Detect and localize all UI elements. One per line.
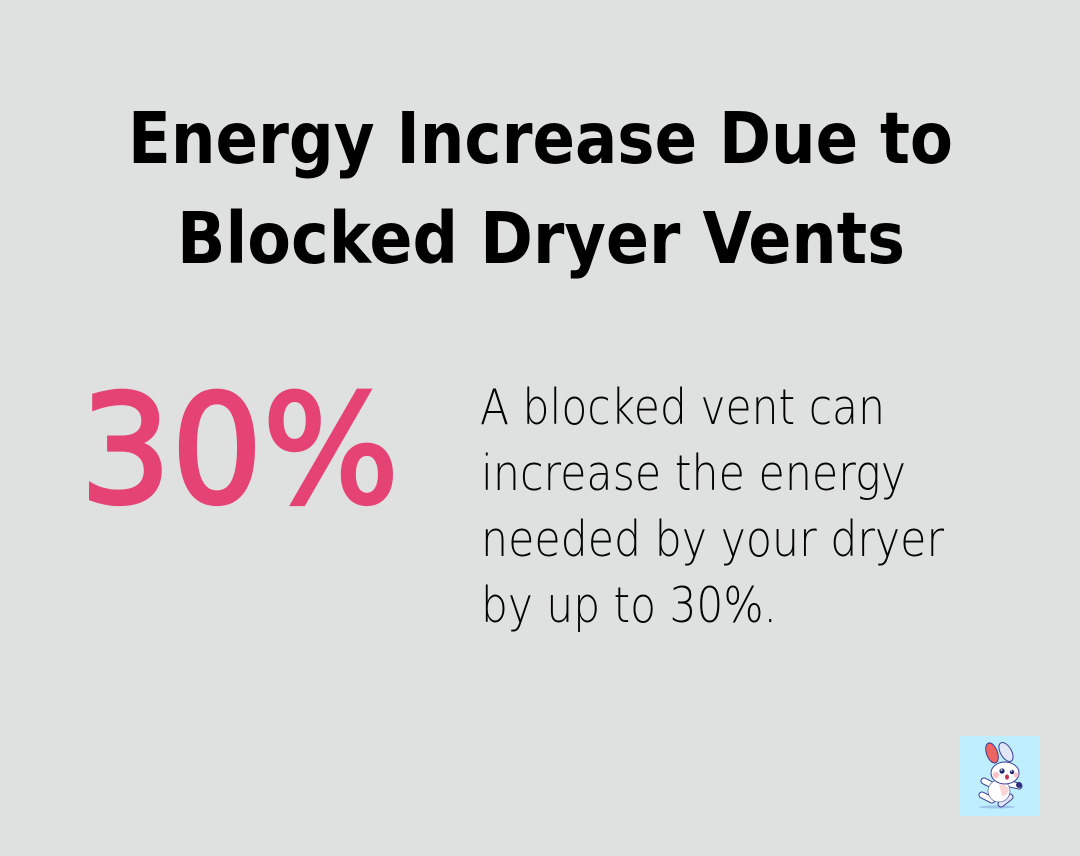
rabbit body	[988, 780, 1010, 802]
rabbit head	[991, 762, 1019, 784]
rabbit ears	[983, 740, 1016, 765]
description text: A blocked vent can	[480, 379, 885, 436]
rabbit limbs	[982, 781, 1019, 804]
description text: needed by your dryer	[481, 511, 945, 568]
description text	[480, 379, 945, 634]
title	[128, 97, 953, 280]
title: Energy Increase Due to	[128, 97, 953, 180]
big stat: 30%: 30%	[80, 364, 399, 538]
title: Blocked Dryer Vents	[177, 197, 905, 280]
icon: running rabbit	[960, 736, 1040, 816]
description text: by up to 30%.	[481, 577, 777, 634]
description text: increase the energy	[481, 445, 906, 502]
